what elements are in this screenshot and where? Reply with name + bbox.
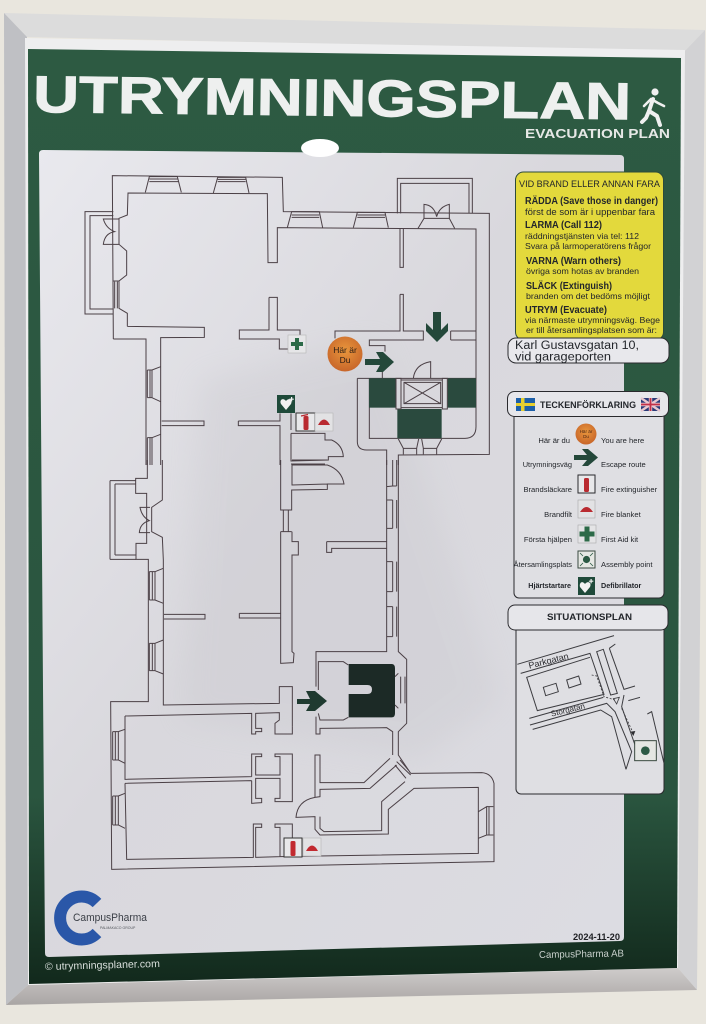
step: rädda (525, 196, 658, 217)
step: varna: VARNA (Warn others) (526, 256, 621, 267)
icon: defibrillator on plan (277, 395, 295, 413)
diagonal and side windows (113, 729, 493, 838)
row: defibrillator: Defibrillator (601, 581, 642, 590)
step: varna (526, 256, 639, 276)
core (357, 372, 476, 465)
icon: you are here marker: Du (340, 355, 351, 365)
row: assembly point (514, 551, 653, 569)
icon: you are here marker: Här är (333, 345, 357, 355)
row: fire extinguisher: Fire extinguisher (601, 485, 658, 494)
paper sheet (39, 150, 624, 957)
step: utrym: UTRYM (Evacuate) (525, 305, 607, 316)
icon: swedish flag (516, 398, 535, 411)
step: utrym: via närmaste utrymningsväg. Bege (525, 316, 660, 325)
row: fire blanket (544, 500, 642, 519)
row: you are here: You are here (601, 436, 644, 445)
partitions (164, 613, 281, 619)
site plan heading (508, 605, 668, 630)
step: släck: branden om det bedöms möjligt (526, 292, 651, 301)
row: first aid: Första hjälpen (524, 535, 572, 544)
floor plan: upper part (85, 176, 489, 465)
glare on glass (301, 139, 339, 157)
row: fire blanket: Brandfilt (544, 510, 573, 519)
row: escape route (523, 449, 646, 469)
row: you are here: Här är (580, 429, 593, 434)
arrow: escape route right, lower (297, 691, 327, 711)
row: first aid (524, 525, 639, 544)
panel: assembly address: vid garageporten (515, 352, 611, 364)
row: defibrillator (528, 577, 642, 595)
door (413, 362, 431, 378)
left windows (149, 568, 163, 674)
stairs (369, 378, 476, 438)
site plan heading: SITUATIONSPLAN (547, 612, 632, 623)
balcony left (85, 212, 119, 314)
floor plan: lower part (110, 460, 494, 869)
step: utrym (525, 305, 660, 335)
subtitle: EVACUATION PLAN (525, 127, 670, 141)
row: escape route: Utrymningsväg (523, 460, 572, 469)
outer and main walls (112, 176, 489, 465)
icon: you are here marker (328, 336, 362, 372)
logo text: CampusPharma (73, 912, 148, 924)
partitions (335, 229, 476, 352)
icon: fire blanket upper (315, 413, 333, 431)
step: varna: övriga som hotas av branden (526, 267, 639, 276)
row: first aid: First Aid kit (601, 535, 639, 544)
step: larma: Svara på larmoperatörens frågor (525, 241, 651, 251)
left wall and balcony (111, 460, 494, 869)
panel: site plan (508, 605, 668, 794)
panel: assembly address: Karl Gustavsgatan 10, (515, 340, 639, 352)
elevator (396, 378, 447, 409)
date: 2024-11-20 (573, 932, 620, 943)
step: rädda: RÄDDA (Save those in danger) (525, 196, 658, 207)
row: escape route: Escape route (601, 460, 646, 469)
room partitions (162, 413, 343, 465)
row: defibrillator: Hjärtstartare (528, 581, 571, 590)
left wall windows (147, 367, 161, 465)
legend heading (508, 392, 668, 416)
row: fire extinguisher: Brandsläckare (523, 485, 572, 494)
panel: fire instructions (516, 172, 664, 340)
step: larma: räddningstjänsten via tel: 112 (525, 232, 639, 241)
icon: fire blanket lower (303, 838, 321, 856)
icon: fire extinguisher lower (284, 838, 302, 857)
icon: assembly point on map (635, 741, 656, 761)
instructions heading: VID BRAND ELLER ANNAN FARA (519, 179, 661, 189)
row: you are here (538, 424, 644, 445)
street label: storgatan: Storgatan (550, 701, 586, 719)
row: fire extinguisher (523, 475, 658, 494)
icon: running man (642, 88, 664, 125)
row: you are here: Du (583, 434, 589, 439)
rooms bottom (125, 713, 478, 859)
step: släck (526, 281, 651, 301)
row: assembly point: Återsamlingsplats (514, 560, 572, 569)
dark spiral stairs (349, 664, 395, 717)
stair room (316, 662, 405, 755)
row: assembly point: Assembly point (601, 560, 653, 569)
logo tagline: PALMAKACO GROUP (100, 926, 136, 930)
company name: CampusPharma AB (539, 949, 624, 961)
step: släck: SLÄCK (Extinguish) (526, 281, 612, 292)
windows top (145, 177, 388, 228)
icon: first aid on plan (288, 335, 306, 353)
step: larma (525, 220, 651, 251)
icon: fire extinguisher upper (296, 413, 315, 431)
step: utrym: er till återsamlingsplatsen som är: (526, 325, 657, 335)
step: larma: LARMA (Call 112) (525, 220, 602, 231)
legend heading: TECKENFÖRKLARING (540, 400, 636, 411)
site map (517, 636, 664, 769)
right wall (316, 460, 411, 773)
panel: legend (508, 392, 668, 598)
balcony door top right (397, 178, 472, 228)
copyright: © utrymningsplaner.com (45, 958, 160, 973)
arrow: escape route right, upper (365, 352, 394, 372)
icon: uk flag (641, 398, 660, 411)
street label: parkgatan: Parkgatan (527, 651, 570, 671)
logo: CampusPharma (60, 896, 148, 940)
row: you are here: Här är du (538, 436, 570, 445)
panel: assembly address (508, 338, 669, 364)
central wall (281, 460, 344, 663)
step: rädda: först de som är i uppenbar fara (525, 207, 655, 217)
title: UTRYMNINGSPLAN (33, 66, 632, 131)
arrow: escape route down (426, 312, 448, 342)
row: fire blanket: Fire blanket (601, 510, 642, 519)
